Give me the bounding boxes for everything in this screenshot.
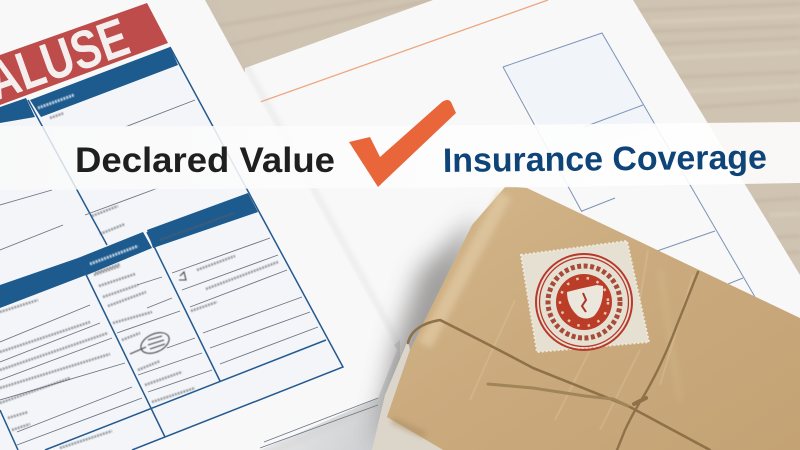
blue header bands xyxy=(0,47,258,308)
label: Insurance Coverage: Insurance Coverage xyxy=(443,139,767,180)
left document form xyxy=(0,0,402,450)
white text on blue headers xyxy=(38,95,138,264)
parcel shadow xyxy=(372,215,480,450)
translucent label strip xyxy=(0,122,800,190)
disc dots xyxy=(560,278,608,326)
inner red disc xyxy=(556,274,612,330)
illegible form text xyxy=(0,113,278,448)
red banner xyxy=(0,3,168,105)
form field rules xyxy=(0,100,378,448)
circular lettering xyxy=(548,266,620,338)
orange check mark xyxy=(349,100,456,187)
blue grid lines xyxy=(503,33,755,297)
shield xyxy=(567,285,603,318)
right paper sheet xyxy=(215,0,800,450)
twine xyxy=(408,272,710,450)
signature icon xyxy=(130,272,186,357)
form interior xyxy=(0,65,343,450)
lower paper shading xyxy=(260,340,400,450)
shield key mark xyxy=(582,293,586,312)
pale wrapping film at parcel edge xyxy=(372,340,443,450)
stamp paper xyxy=(521,241,649,352)
parcel folds xyxy=(392,195,680,435)
postage stamp seal xyxy=(521,241,649,352)
outer red rings xyxy=(536,254,632,350)
left paper xyxy=(0,0,397,450)
empty blue box xyxy=(503,33,657,160)
left paper shadow xyxy=(210,0,402,450)
form frame lines xyxy=(0,47,343,450)
label: Declared Value: Declared Value xyxy=(75,141,335,180)
orange line on right sheet xyxy=(215,0,548,118)
kraft paper parcel xyxy=(387,186,800,450)
